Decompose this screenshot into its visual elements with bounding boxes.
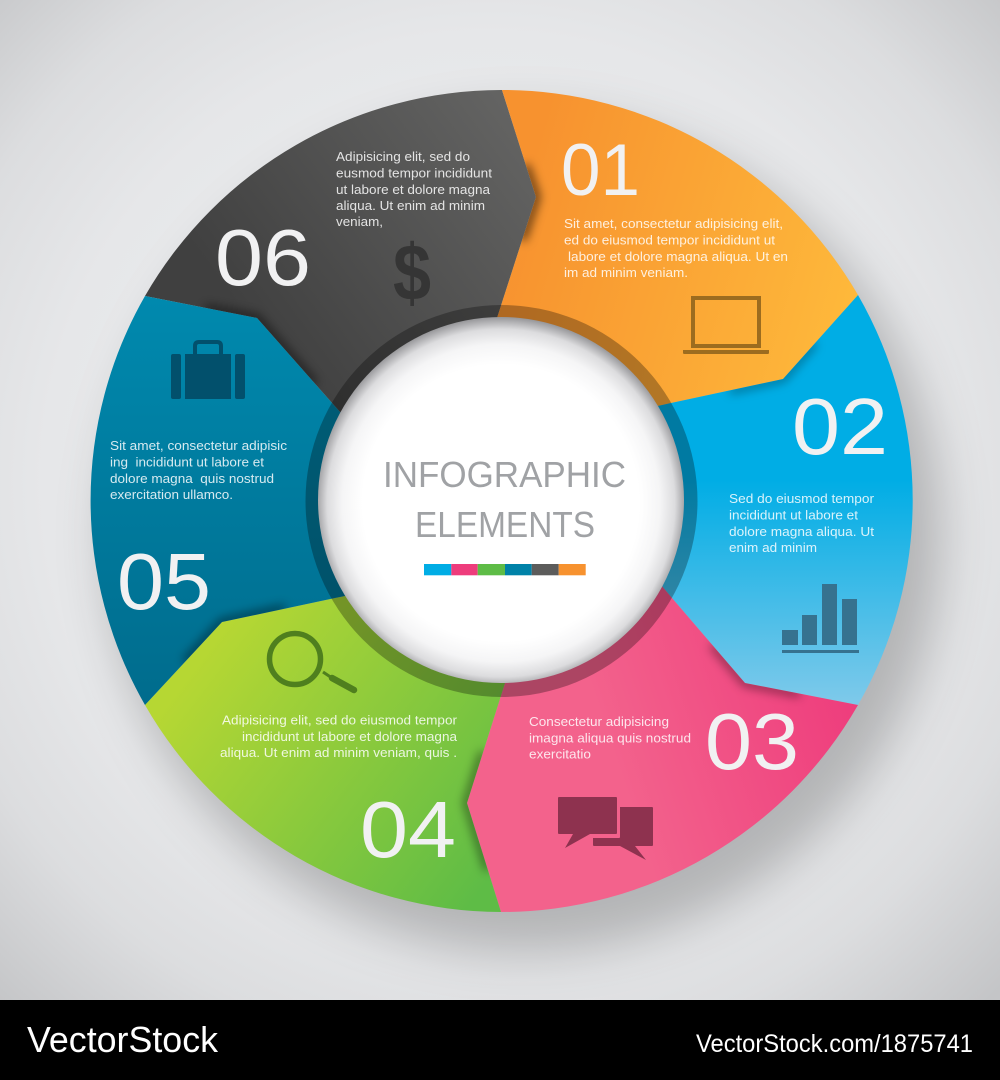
text 05: dolore magna quis nostrud [110, 472, 274, 486]
number 03: 03 [705, 697, 799, 786]
center hub [306, 305, 698, 697]
text 02: dolore magna aliqua. Ut [729, 525, 875, 539]
content 03 [529, 697, 799, 860]
segment 04 [145, 501, 508, 912]
footer url: VectorStock.com/1875741 [696, 1030, 973, 1058]
segment 06 [145, 90, 536, 501]
title: ELEMENTS [415, 504, 595, 545]
footer bar [0, 1000, 1000, 1080]
text 03: imagna aliqua quis nostrud [529, 732, 691, 746]
panel: 02 blue [501, 295, 913, 705]
icon: magnifier [270, 634, 354, 690]
panel: 06 dark gray [145, 90, 536, 501]
text 04: Adipisicing elit, sed do eiusmod tempor [222, 714, 457, 728]
text 03: exercitatio [529, 748, 591, 762]
text 06: veniam, [336, 215, 383, 229]
icon: laptop [683, 296, 769, 354]
number 05: 05 [117, 537, 211, 626]
text 05: ing incididunt ut labore et [110, 456, 265, 470]
content 06 [215, 150, 493, 317]
text 01: labore et dolore magna aliqua. Ut en [568, 250, 788, 264]
hub ring [306, 305, 698, 697]
text 06: aliqua. Ut enim ad minim [336, 199, 485, 213]
title [383, 454, 626, 545]
icon: briefcase [171, 342, 245, 399]
content 02 [729, 382, 888, 653]
text 01: ed do eiusmod tempor incididunt ut [564, 234, 776, 248]
text 01: Sit amet, consectetur adipisicing elit, [564, 217, 783, 231]
text 02: enim ad minim [729, 541, 817, 555]
panel: 04 green [145, 501, 508, 912]
text 06: ut labore et dolore magna [336, 183, 490, 197]
color bar [424, 564, 586, 575]
hub disc [318, 317, 684, 683]
number 01: 01 [561, 130, 640, 211]
text 06: Adipisicing elit, sed do [336, 150, 470, 164]
number 06: 06 [215, 213, 311, 302]
text 05: exercitation ullamco. [110, 488, 233, 502]
footer logo: VectorStock [27, 1019, 219, 1060]
content 01 [561, 130, 788, 354]
text 04: incididunt ut labore et dolore magna [242, 730, 457, 744]
icon: chat bubbles [558, 797, 653, 860]
panel: 05 teal [91, 296, 501, 705]
icon: dollar sign: $ [393, 228, 431, 317]
segment 03 [467, 501, 858, 912]
text 01: im ad minim veniam. [564, 266, 688, 280]
segment 05 [91, 296, 501, 705]
content 05 [110, 342, 287, 626]
text 06: eusmod tempor incididunt [336, 166, 493, 180]
text 02: Sed do eiusmod tempor [729, 492, 874, 506]
segment 01 [494, 90, 858, 501]
text 02: incididunt ut labore et [729, 508, 859, 522]
number 02: 02 [792, 382, 888, 471]
panel: 01 orange [494, 90, 858, 501]
number 04: 04 [360, 785, 456, 874]
segment 02 [501, 295, 913, 705]
text 05: Sit amet, consectetur adipisic [110, 439, 287, 453]
content 04 [220, 634, 457, 874]
icon: bar chart [782, 584, 859, 653]
text 03: Consectetur adipisicing [529, 715, 669, 729]
title: INFOGRAPHIC [383, 454, 626, 495]
text 04: aliqua. Ut enim ad minim veniam, quis . [220, 746, 457, 760]
panel: 03 pink [467, 501, 858, 912]
